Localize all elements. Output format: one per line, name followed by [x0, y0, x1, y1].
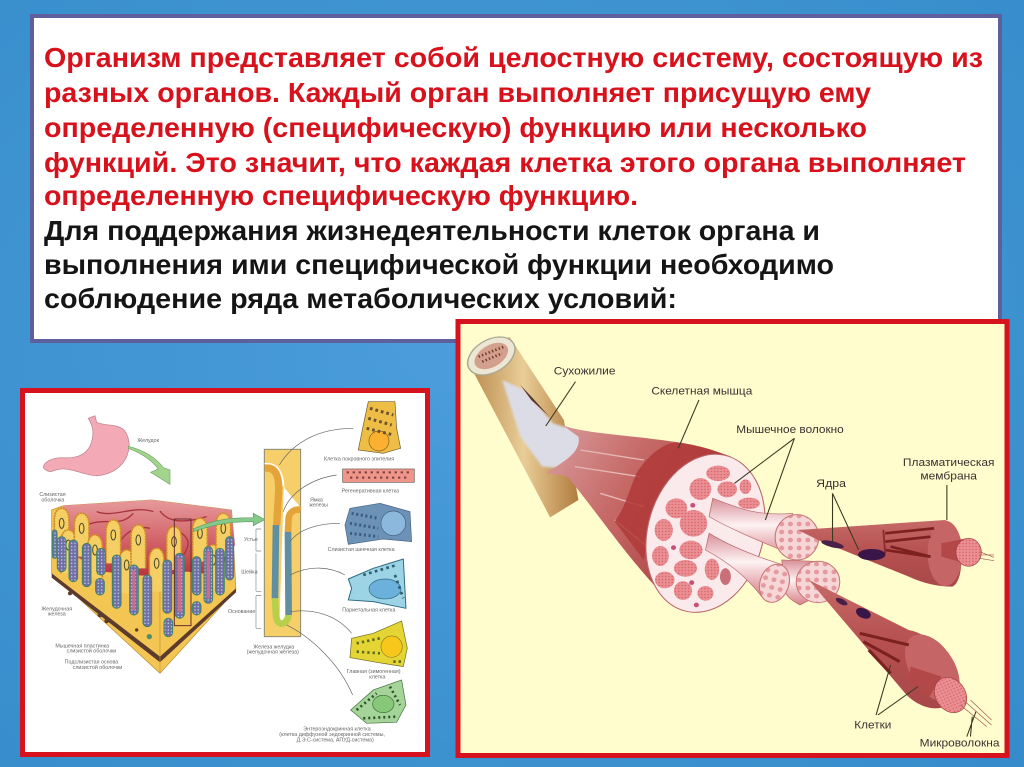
cell: chief: клетка: [369, 674, 385, 680]
gland detail: Устье: [244, 537, 258, 543]
gland detail: Шейка: [241, 569, 258, 576]
icon: stomach: Желудок: [137, 438, 160, 444]
red paragraph: функций. Это значит, что каждая клетка этого органа выполняет: [44, 147, 966, 178]
labels: wall layers: [39, 492, 122, 671]
gland detail: Ямка: [310, 497, 323, 503]
gland detail: [228, 449, 328, 656]
lower-right cone: muscle fibre bundle: [809, 580, 992, 727]
muscle labels: Микроволокна: [920, 736, 1000, 749]
cell: mucous neck: Слизистая шеечная клетка: [328, 547, 395, 553]
black paragraph: [44, 215, 834, 314]
cell: regenerative: Регенеративная клетка: [342, 489, 399, 495]
cell: chief: [347, 621, 407, 680]
cell: parietal: [342, 559, 406, 614]
red paragraph: разных органов. Каждый орган выполняет присущую ему: [44, 77, 872, 108]
cell: enteroendocrine: Д.Э.С-система, АПУД-система): [297, 737, 374, 743]
cell: enteroendocrine: Энтероэндокринная клетка: [303, 727, 371, 733]
muscle labels: мембрана: [920, 469, 977, 482]
gland detail: железы: [309, 503, 328, 509]
three opened fibres: [705, 498, 840, 605]
leader lines: [546, 382, 976, 737]
muscle labels: Скелетная мышца: [651, 384, 753, 398]
labels: wall layers: Мышечная пластинка: [55, 643, 109, 649]
black paragraph: выполнения ими специфической функции необходимо: [44, 249, 834, 280]
cell: surface epithelium: Клетка покровного эпителия: [324, 457, 394, 463]
red paragraph: [44, 42, 983, 211]
labels: wall layers: оболочка: [41, 497, 64, 503]
stomach wall block: [52, 500, 236, 673]
panel: stomach diagram: [22, 390, 428, 754]
labels: wall layers: Подслизистая основа: [65, 660, 118, 666]
muscle labels: Клетки: [854, 718, 891, 731]
muscle labels: Сухожилие: [554, 364, 616, 377]
labels: wall layers: слизистой оболочки: [73, 664, 122, 671]
cell: mucous neck: [328, 503, 412, 553]
red paragraph: определенную специфическую функцию.: [44, 180, 638, 211]
muscle labels: [554, 364, 1000, 749]
cell: parietal: Париетальная клетка: [342, 608, 395, 614]
black paragraph: Для поддержания жизнедеятельности клеток органа и: [44, 215, 820, 246]
cell: chief: Главная (зимогенная): [347, 669, 401, 675]
labels: wall layers: железа: [48, 612, 66, 618]
cell: enteroendocrine: (клетка диффузной эндокринной системы,: [279, 731, 385, 738]
gland detail: Основание: [228, 609, 255, 615]
labels: wall layers: слизистой оболочки: [67, 648, 116, 655]
red paragraph: Организм представляет собой целостную систему, состоящую из: [44, 42, 983, 73]
panel: muscle diagram: [458, 322, 1007, 756]
black paragraph: соблюдение ряда метаболических условий:: [44, 283, 677, 314]
arrow: wall to gland: [193, 513, 265, 532]
arrow: stomach to wall: [128, 446, 170, 484]
muscle labels: Мышечное волокно: [736, 422, 844, 436]
muscle belly: [546, 425, 731, 610]
muscle labels: Плазматическая: [903, 455, 994, 469]
red paragraph: определенную (специфическую) функцию или несколько: [44, 112, 867, 143]
upper-right cone: muscle fibre bundle: [798, 520, 994, 587]
icon: stomach: [43, 416, 160, 476]
muscle cross-section: [631, 444, 780, 623]
gland detail: Железа желудка: [253, 644, 294, 650]
labels: wall layers: Желудочная: [41, 606, 72, 612]
panel: intro text: [32, 16, 1000, 341]
connector arrows: [279, 428, 353, 695]
cell: surface epithelium: [324, 402, 401, 463]
cell: regenerative: [342, 469, 414, 495]
labels: wall layers: Слизистая: [39, 492, 66, 498]
muscle labels: Ядра: [816, 476, 846, 490]
cell: enteroendocrine: [279, 680, 406, 743]
gland detail: (желудочная железа): [247, 650, 299, 656]
tendon: [460, 329, 586, 517]
